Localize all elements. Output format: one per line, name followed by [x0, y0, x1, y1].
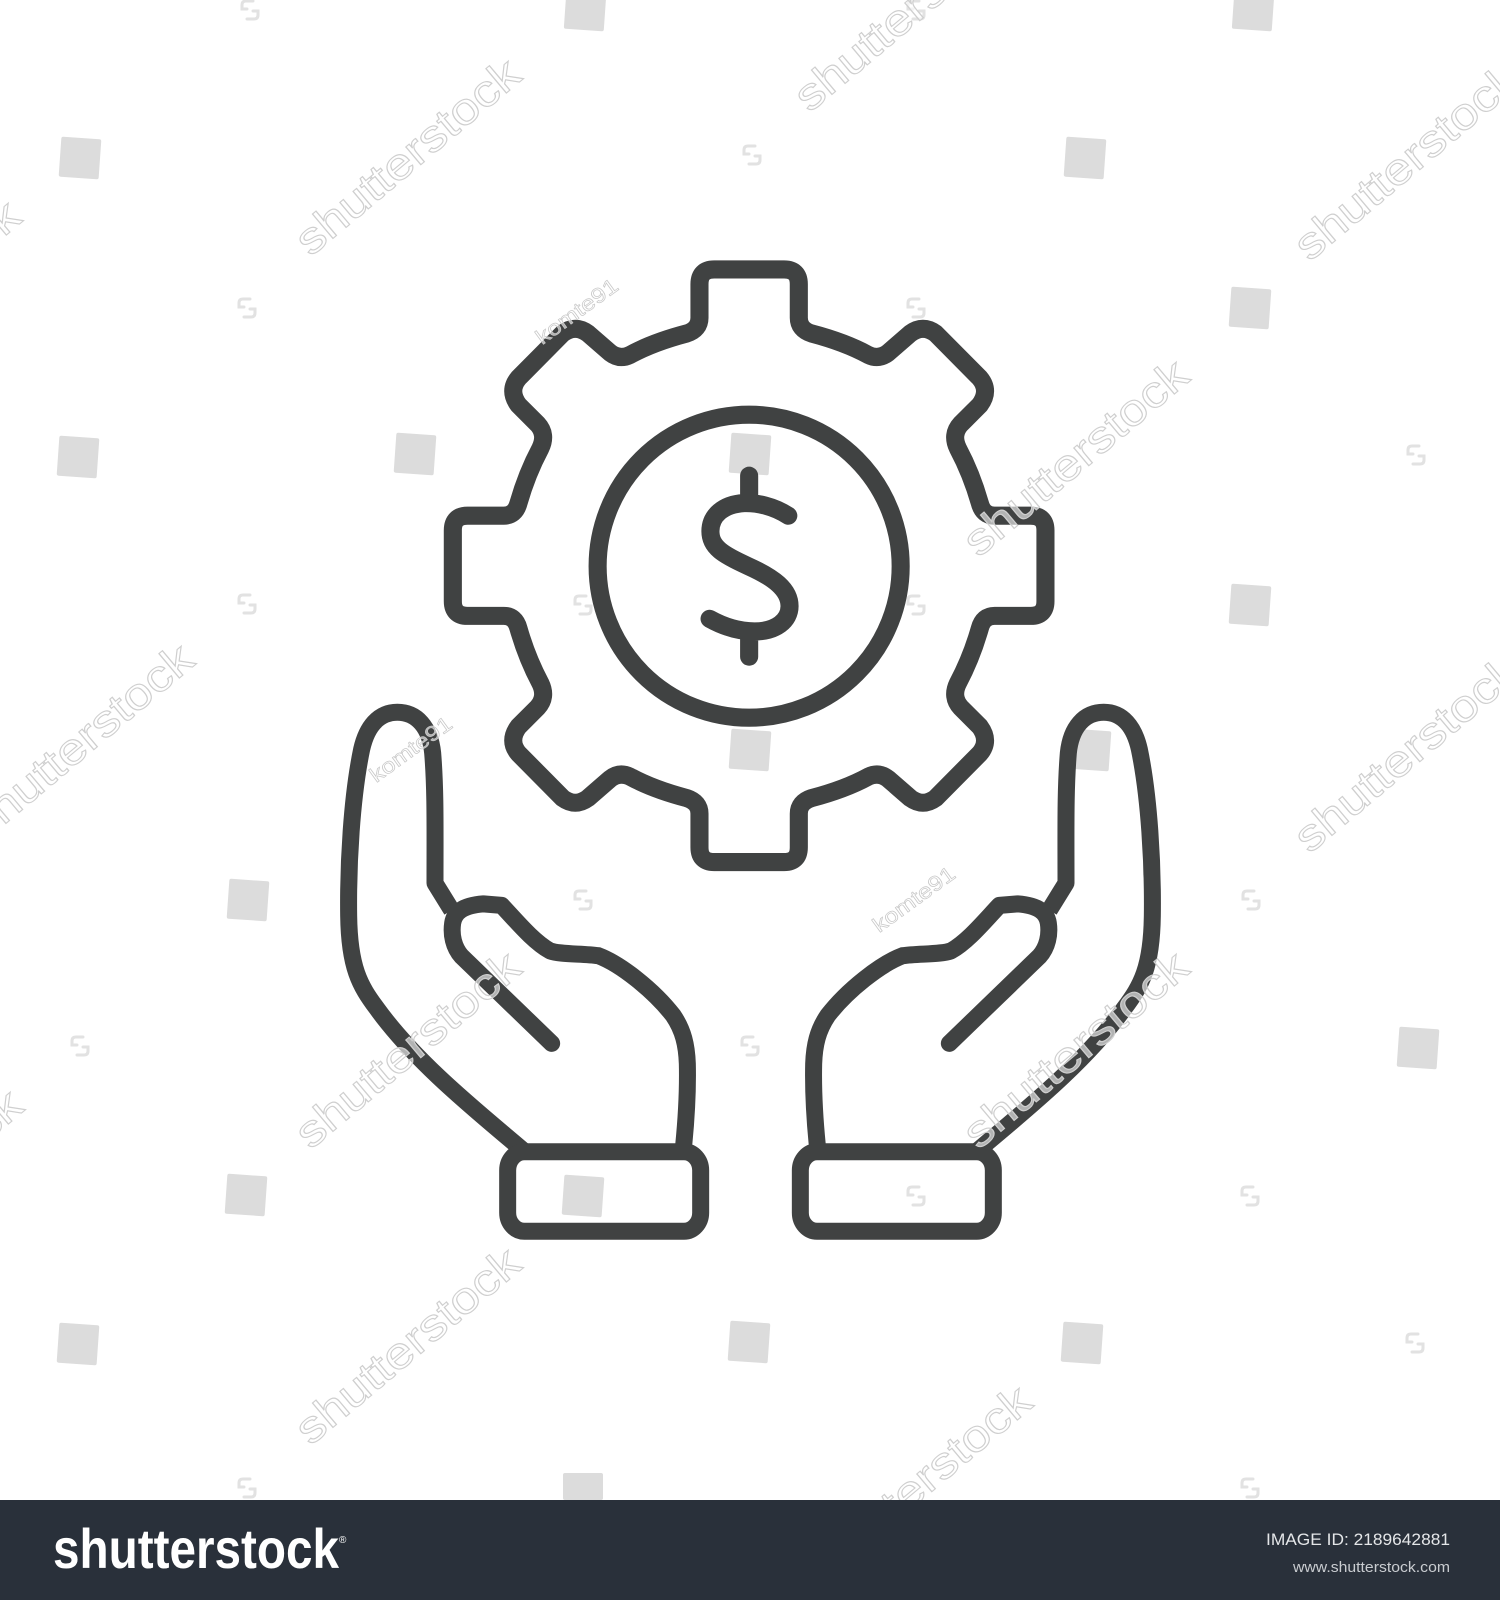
site url: www.shutterstock.com [1292, 1559, 1450, 1576]
watermark text: contributor name: komte91 [869, 862, 960, 937]
image id: IMAGE ID: 2189642881 [1266, 1530, 1450, 1549]
cuff [800, 1152, 993, 1231]
dollar sign [710, 476, 790, 657]
icon: left hand [349, 712, 701, 1231]
watermark text: shutterstock: shutterstock [796, 1375, 1042, 1592]
icon: right hand [800, 712, 1152, 1231]
icon: gear with dollar sign [453, 269, 1045, 862]
watermark text: contributor name: komte91 [366, 712, 457, 787]
fingers [814, 904, 1049, 1149]
coin circle [598, 415, 901, 718]
gear outline [453, 269, 1045, 862]
palm outer edge and thumb [349, 712, 523, 1151]
watermark text: contributor name: komte91 [532, 274, 623, 349]
cuff [508, 1152, 701, 1231]
palm outer edge and thumb [978, 712, 1152, 1151]
watermark text: shutterstock: shutterstock [1284, 53, 1500, 270]
watermark text: shutterstock: shutterstock [953, 941, 1199, 1158]
watermark text: shutterstock: shutterstock [285, 941, 531, 1158]
fingers [452, 904, 687, 1149]
watermark text: contributor name [366, 274, 960, 937]
watermark text: shutterstock: shutterstock [1284, 645, 1500, 862]
watermark text: shutterstock: shutterstock [285, 1237, 531, 1454]
watermark text: shutterstock: shutterstock [285, 48, 531, 265]
registered mark: ® [339, 1535, 347, 1546]
watermark text: shutterstock: shutterstock [953, 349, 1199, 566]
footer logo: shutterstock [53, 1517, 340, 1580]
footer bar [0, 1500, 1500, 1600]
